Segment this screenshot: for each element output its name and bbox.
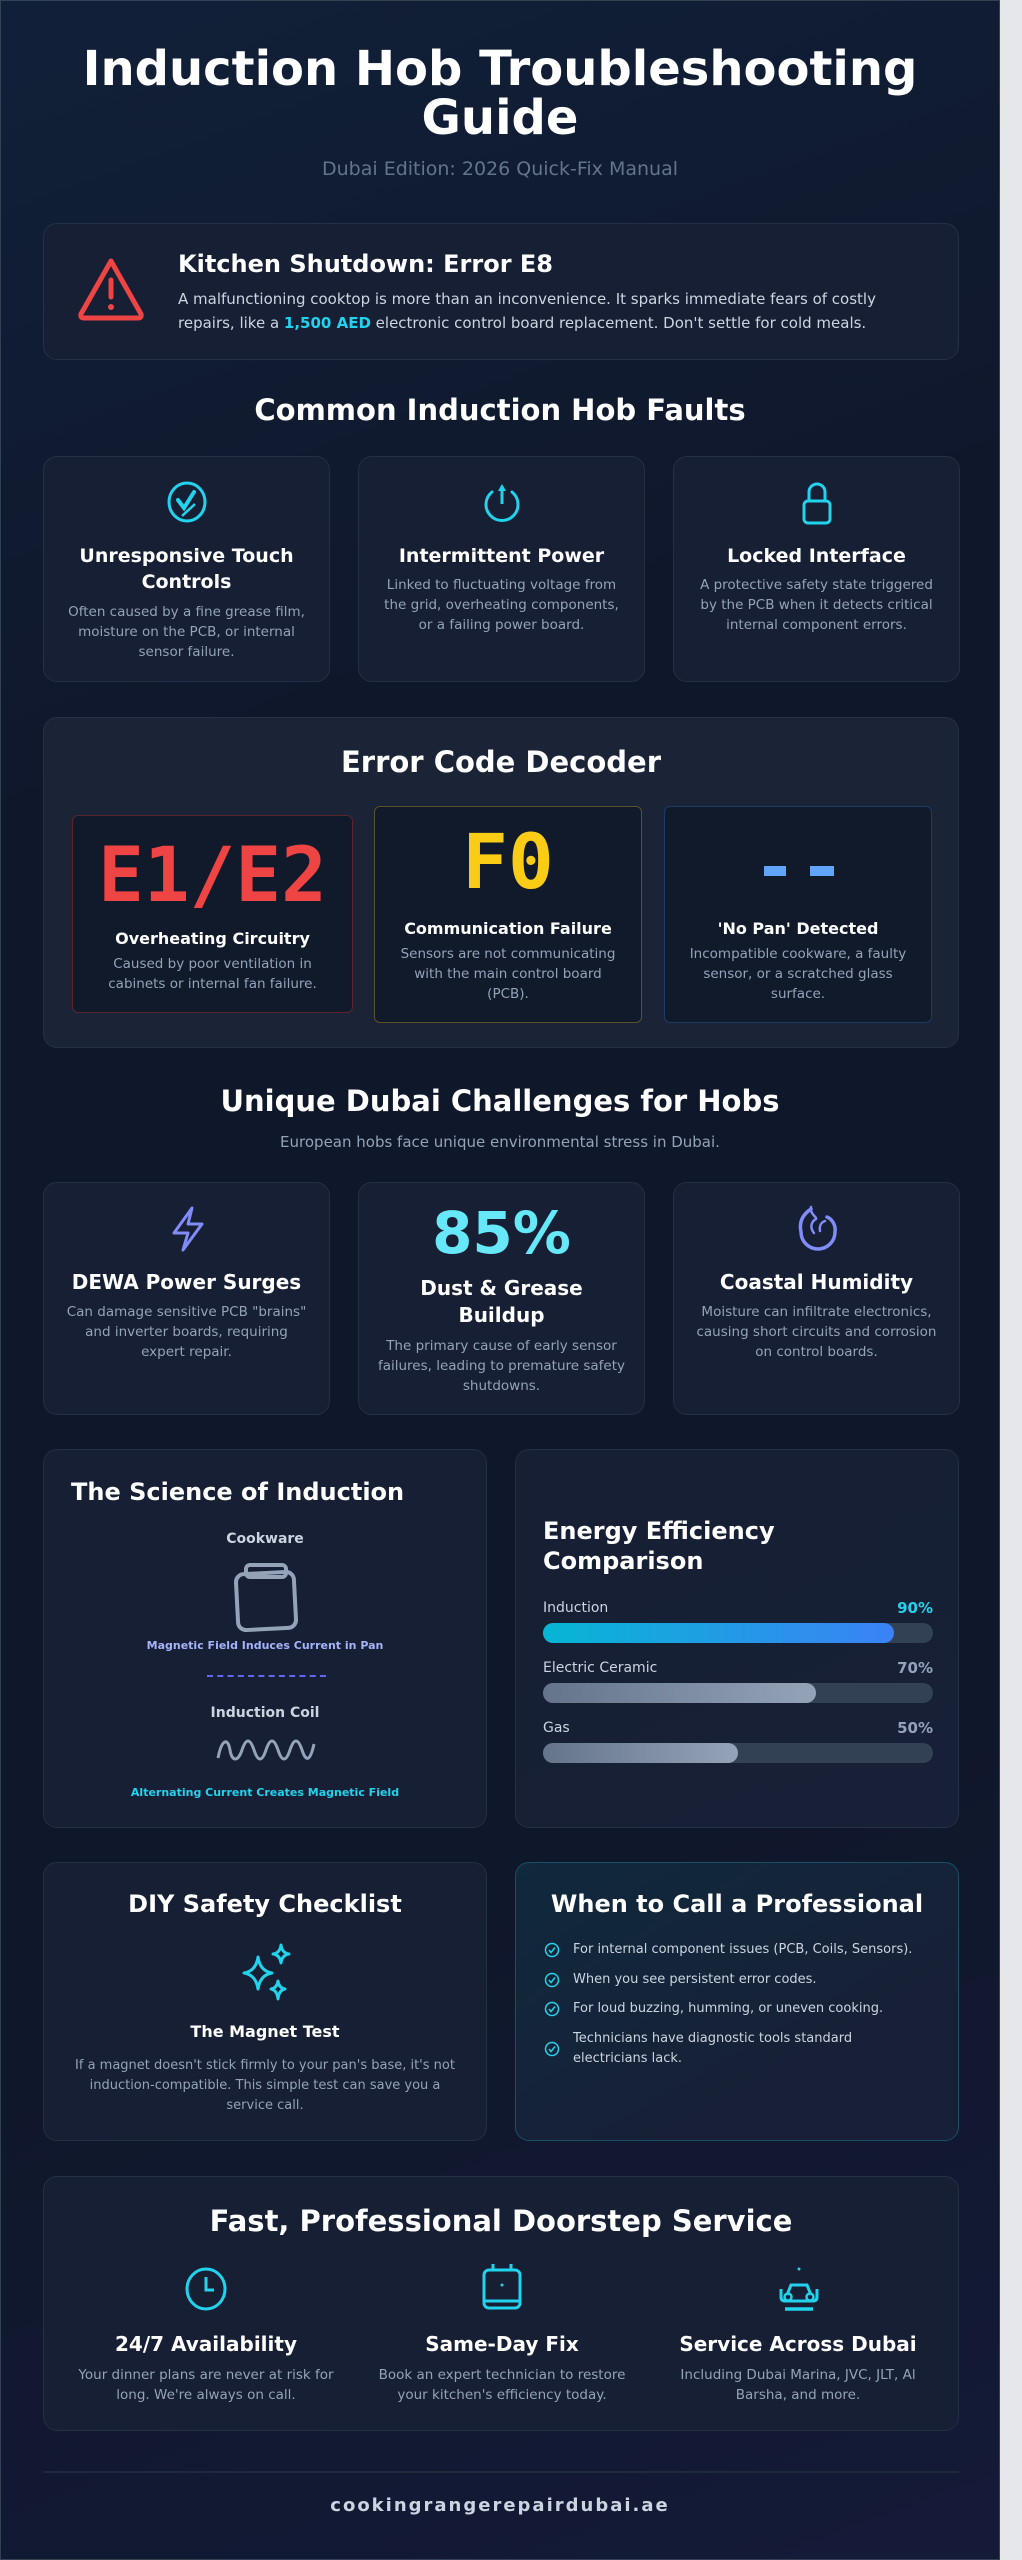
service: across Dubai: Including Dubai Marina, JVC, JLT, Al Barsha, and more. [680, 2367, 916, 2403]
icon: sparkles [242, 1944, 290, 2000]
service: across Dubai: Service Across Dubai [679, 2332, 917, 2356]
panel: error code decoder [43, 717, 959, 1048]
service: 24/7 [78, 2268, 334, 2403]
fault title: Controls [142, 571, 231, 593]
service: same-day: Book an expert technician to restore your kitchen's efficiency today. [379, 2367, 625, 2403]
panel: DIY safety checklist: If a magnet doesn't stick firmly to your pan's base, it's not induction-compatible. This simple test can save you a service call. [75, 2058, 455, 2113]
stat 85%: 85% [432, 1199, 571, 1267]
icon: warning triangle [78, 258, 144, 320]
panel: fault locked interface [673, 456, 960, 682]
decoder heading: Error Code Decoder [341, 745, 661, 779]
alert heading: Kitchen Shutdown: Error E8 [178, 250, 553, 278]
panel: energy efficiency: Comparison [543, 1547, 703, 1575]
panel: when to call a professional: When to Call a Professional [551, 1890, 923, 1918]
service: 24/7: 24/7 Availability [115, 2332, 297, 2356]
panel: DIY safety checklist: The Magnet Test [190, 2022, 340, 2041]
code card F0: F0 [462, 817, 554, 906]
panel: doorstep service: Fast, Professional Doorstep Service [210, 2204, 792, 2238]
subheading: European hobs face unique environmental stress in Dubai. [280, 1133, 720, 1151]
icon: power [484, 484, 520, 522]
fault desc: Often caused by a fine grease film, moisture on the PCB, or internal sensor failure. [68, 604, 305, 660]
fault desc: A protective safety state triggered by the PCB when it detects critical internal component errors. [700, 577, 933, 633]
icon: humidity [798, 1206, 837, 1251]
heading: Dubai challenges: Unique Dubai Challenges for Hobs [220, 1084, 780, 1118]
panel: science of induction [43, 1449, 487, 1828]
icon: pan [234, 1563, 298, 1632]
title: Guide [422, 90, 578, 146]
panel: science of induction: Alternating Current Creates Magnetic Field [131, 1786, 399, 1799]
panel: when to call a professional: For loud buzzing, humming, or uneven cooking. [573, 2001, 883, 2016]
bar chart: Induction [543, 1600, 608, 1616]
code card no pan: 'No Pan' Detected [718, 919, 878, 938]
alert body: A malfunctioning cooktop is more than an inconvenience. It sparks immediate fears of costly repairs, like a 1,500 AED electronic control board replacement. Don't settle for cold meals. [178, 290, 876, 332]
panel: dust stat: The primary cause of early sensor failures, leading to premature safety shutdowns. [378, 1338, 625, 1394]
code card F0: Sensors are not communicating with the main control board (PCB). [401, 946, 615, 1002]
panel: dust stat: Dust & Grease [420, 1276, 583, 1300]
panel: DEWA surges: Can damage sensitive PCB "brains" and inverter boards, requiring expert repair. [67, 1304, 306, 1360]
service: 24/7: Your dinner plans are never at risk for long. We're always on call. [78, 2367, 334, 2403]
fault desc: Linked to fluctuating voltage from the grid, overheating components, or a failing power board. [384, 577, 619, 633]
checklist [544, 1942, 912, 2066]
panel: coastal humidity [673, 1182, 960, 1415]
bar chart [543, 1599, 933, 1763]
icon: touch check [168, 482, 206, 522]
heading: faults: Common Induction Hob Faults [254, 393, 746, 427]
panel: DIY safety checklist [43, 1862, 487, 2141]
title: Induction Hob Troubleshooting [83, 41, 917, 97]
title [83, 41, 917, 146]
code card E1/E2: Overheating Circuitry [115, 929, 310, 948]
service: same-day [379, 2264, 625, 2403]
panel: coastal humidity: Moisture can infiltrate electronics, causing short circuits and corrosion on control boards. [696, 1304, 936, 1360]
code card no pan [664, 806, 932, 1023]
panel: science of induction: Induction Coil [211, 1705, 319, 1721]
code card E1/E2: Caused by poor ventilation in cabinets or internal fan failure. [108, 956, 317, 992]
panel: DIY safety checklist: DIY Safety Checklist [128, 1890, 402, 1918]
bar chart: 50% [897, 1719, 933, 1737]
panel: dust stat: Buildup [458, 1303, 545, 1327]
panel: fault intermittent power [358, 456, 645, 682]
icon: lock [802, 482, 832, 524]
panel: science of induction: The Science of Induction [71, 1478, 404, 1506]
panel: energy efficiency [515, 1449, 959, 1828]
bar chart: 90% [897, 1599, 933, 1617]
panel: fault touch controls [43, 456, 330, 682]
panel: science of induction: Cookware [226, 1531, 304, 1547]
fault title: Locked Interface [727, 545, 906, 567]
icon: lightning [172, 1206, 204, 1252]
panel: science of induction: Magnetic Field Induces Current in Pan [147, 1639, 383, 1652]
panel: alert [43, 223, 959, 360]
code card no pan: Incompatible cookware, a faulty sensor, or a scratched glass surface. [690, 946, 906, 1002]
code card F0 [374, 806, 642, 1023]
panel: DEWA surges: DEWA Power Surges [72, 1270, 301, 1294]
fault title: Intermittent Power [399, 545, 604, 567]
bar chart: Gas [543, 1720, 570, 1736]
bar chart: Electric Ceramic [543, 1660, 657, 1676]
panel: energy efficiency: Energy Efficiency [543, 1517, 775, 1545]
service: across Dubai [679, 2268, 917, 2403]
code card F0: Communication Failure [404, 919, 612, 938]
service: same-day: Same-Day Fix [425, 2332, 579, 2356]
bar chart: 70% [897, 1659, 933, 1677]
panel: DEWA surges [43, 1182, 330, 1415]
panel: when to call a professional: Technicians have diagnostic tools standard electricians lack. [573, 2031, 852, 2066]
subtitle: Dubai Edition: 2026 Quick-Fix Manual [322, 158, 678, 180]
panel: doorstep service [43, 2176, 959, 2431]
code card E1/E2 [72, 815, 353, 1013]
panel: when to call a professional: When you see persistent error codes. [573, 1972, 817, 1987]
panel: when to call a professional [515, 1862, 959, 2141]
panel: dust stat [358, 1182, 645, 1415]
panel: when to call a professional: For internal component issues (PCB, Coils, Sensors). [573, 1942, 912, 1957]
fault title: Unresponsive Touch [79, 545, 294, 567]
icon: coil wave [216, 1740, 316, 1760]
fault title [79, 545, 294, 593]
panel: coastal humidity: Coastal Humidity [720, 1270, 913, 1294]
footer: cookingrangerepairdubai.ae [330, 2495, 670, 2516]
code card E1/E2: E1/E2 [98, 830, 327, 919]
